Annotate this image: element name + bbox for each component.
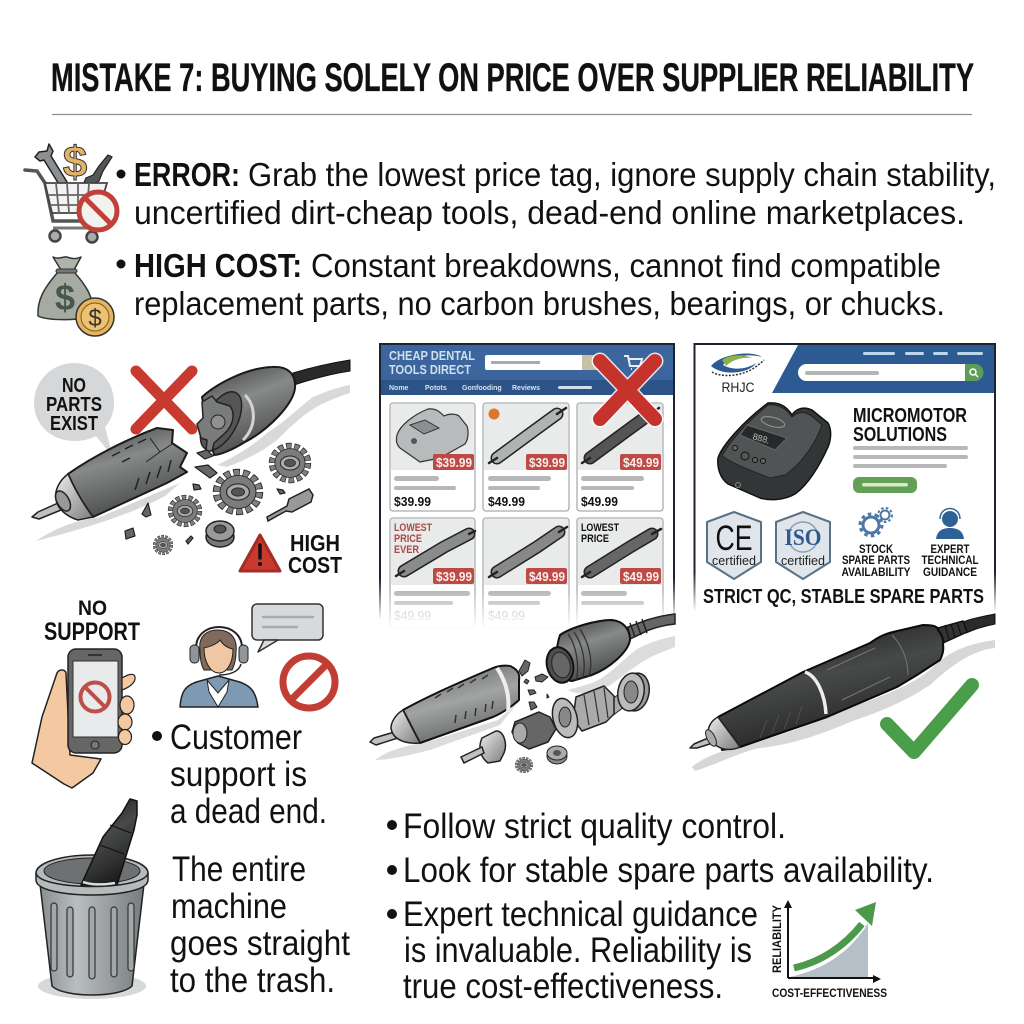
warning triangle [240,535,280,571]
icon: gears [860,508,892,536]
label: expert technical guidance [922,542,978,579]
site header: Nome [389,385,409,392]
logo: RHJC [711,354,764,395]
product grid: PRICE [581,533,609,545]
label: high cost [288,530,342,578]
badge: ISO certified [776,512,830,579]
text: goes to the trash: to the trash. [170,961,335,1000]
label: no support: SUPPORT [44,618,140,646]
product grid: $39.99 [436,570,472,584]
site header: Gonfooding [462,385,502,392]
gears and debris [125,447,313,553]
text: advice list: Look for stable spare parts availability. [403,851,934,890]
heading: micromotor solutions: SOLUTIONS [853,424,947,446]
illustration: reliable handpiece [690,614,995,771]
error text block [116,156,996,231]
speech bubble: no parts exist [34,363,114,457]
badge: CE certified: certified [712,553,756,568]
label: no support [44,597,140,646]
label: stock spare parts availability: AVAILABILITY [842,565,910,579]
text: advice list: Follow strict quality control. [403,807,786,846]
label: no support: NO [78,597,107,620]
text: goes to the trash: The entire [172,850,306,889]
text: advice list [387,807,934,1006]
placeholder copy and button [853,446,968,493]
speech bubble: no parts exist: EXIST [50,413,98,435]
label: high cost: HIGH [290,530,340,556]
supplier header [772,345,994,393]
product grid: $49.99 [623,456,659,470]
product grid: $49.99 [529,570,565,584]
text: goes to the trash [170,850,350,1000]
icon: expert with headset [936,508,964,539]
label: expert technical guidance: EXPERT [930,542,970,556]
text: advice list: is invaluable. Reliability is [404,931,752,970]
green check mark [887,685,972,752]
site header: Potots [425,385,447,392]
icon: hand holding phone [32,649,135,788]
high cost text block: HIGH COST: [134,247,302,284]
illustration: disassembled handpiece [370,614,675,772]
label: expert technical guidance: GUIDANCE [923,565,977,579]
error text block: uncertified dirt-cheap tools, dead-end online marketplaces. [134,194,965,231]
text: customer support: Customer [170,718,302,757]
error text block: ERROR: [134,156,240,193]
red cross [136,371,192,429]
product grid: $39.99 [529,456,565,470]
icon: shopping cart with tools [25,138,117,242]
illustration: broken handpiece [32,360,350,578]
text: advice list: Expert technical guidance [403,895,758,934]
text: advice list: true cost-effectiveness. [403,967,723,1006]
logo: RHJC: RHJC [722,380,755,395]
product grid: PRICE [394,533,422,545]
text: goes to the trash: machine [171,887,287,926]
chart: reliability vs cost-effectiveness: COST-EFFECTIVENESS [772,986,887,1000]
label: stock spare parts availability: STOCK [859,542,893,556]
heading: micromotor solutions: MICROMOTOR [853,405,967,427]
label: expert technical guidance: TECHNICAL [922,553,978,567]
red cross over website [600,361,655,419]
site header [380,344,674,395]
product grid: $49.99 [488,494,525,509]
badge: ISO certified: ISO [784,525,822,550]
icon: customer support agent [180,604,335,708]
speech bubble: no parts exist: PARTS [46,394,102,416]
product grid: $39.99 [394,494,431,509]
icon: money bag and coin: $ [55,277,75,318]
product grid [390,403,663,628]
product grid: EVER [394,544,419,556]
chart: reliability vs cost-effectiveness [770,900,887,1000]
product grid: $49.99 [394,608,431,623]
badge: ISO certified: certified [781,553,825,568]
product grid: $49.99 [581,494,618,509]
product grid: $49.99 [488,608,525,623]
site header: Reviews [512,385,540,392]
text: goes to the trash: goes straight [170,924,350,963]
site header: CHEAP DENTAL [389,348,475,363]
icon: money bag and coin: $ [88,305,102,332]
site header: TOOLS DIRECT [389,362,471,377]
speech bubble: no parts exist: NO [62,375,86,397]
product grid: LOWEST [581,522,619,534]
product grid: $49.99 [623,570,659,584]
micromotor control unit: 888. [751,431,771,446]
product grid: $39.99 [436,456,472,470]
micromotor control unit [718,403,831,500]
icon: handpiece in trash can [36,799,148,999]
rotor parts [461,671,652,772]
heading: micromotor solutions [853,405,967,446]
icon: shopping cart with tools: $ [63,138,87,187]
high cost text block [116,247,945,322]
panel: cheap website [378,344,676,630]
text: customer support: a dead end. [170,792,327,831]
label: stock spare parts availability [842,542,910,579]
badge: CE certified [707,512,761,579]
badge: CE certified: CE [716,519,752,558]
text: customer support [152,718,327,831]
icon: money bag and coin [38,257,114,336]
high cost text block: Constant breakdowns, cannot find compatible [311,247,941,284]
panel: reliable supplier website [694,344,995,612]
label: high cost: COST [288,552,342,578]
product grid: LOWEST [394,522,432,534]
text: customer support: support is [170,755,307,794]
error text block: Grab the lowest price tag, ignore supply chain stability, [248,156,996,193]
label: stock spare parts availability: SPARE PARTS [842,553,910,567]
chart: reliability vs cost-effectiveness: RELIABILITY [770,905,784,973]
high cost text block: replacement parts, no carbon brushes, bearings, or chucks. [134,285,945,322]
